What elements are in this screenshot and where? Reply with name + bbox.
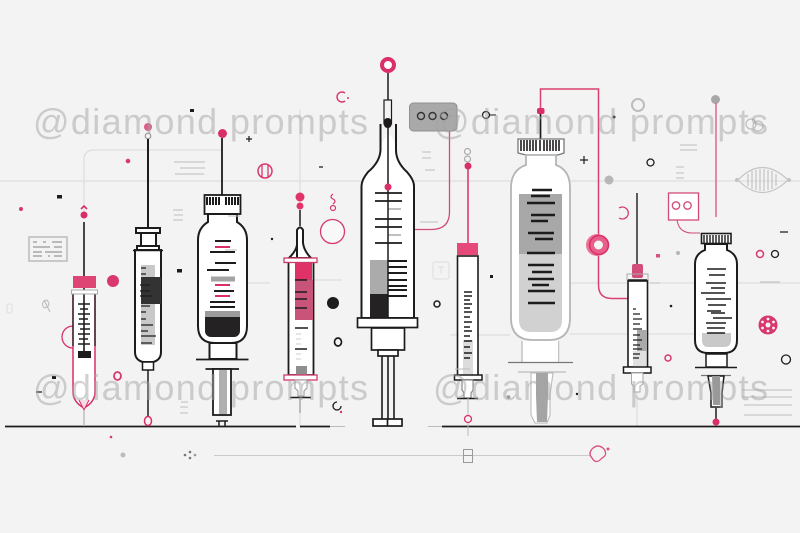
syringe 4	[284, 192, 317, 413]
icon: small table card	[29, 237, 67, 261]
decorative markers: pink	[19, 92, 764, 438]
pink label box with two dots	[668, 193, 700, 233]
icon: pink flower	[758, 316, 778, 334]
syringe 5	[358, 59, 418, 426]
decorative markers: black	[36, 109, 790, 410]
bottom timeline	[184, 446, 609, 462]
watermark top left: @diamond prompts	[33, 101, 368, 142]
watermark top right: @diamond prompts	[433, 101, 768, 142]
watermark bottom right: @diamond prompts	[433, 367, 768, 408]
watermark bottom left: @diamond prompts	[33, 367, 368, 408]
vial 7	[508, 114, 573, 423]
syringe 6	[454, 148, 482, 436]
syringe 2	[133, 123, 163, 426]
vial 9	[695, 95, 737, 426]
icon: dna helix	[736, 168, 790, 192]
syringe 1	[62, 206, 98, 426]
grey label box with three dots	[410, 103, 457, 230]
decorative markers: grey	[7, 99, 792, 458]
vial 3	[196, 129, 248, 426]
syringe 8	[624, 193, 651, 392]
pink connector tube with ring	[537, 89, 628, 298]
baseline	[5, 426, 800, 428]
